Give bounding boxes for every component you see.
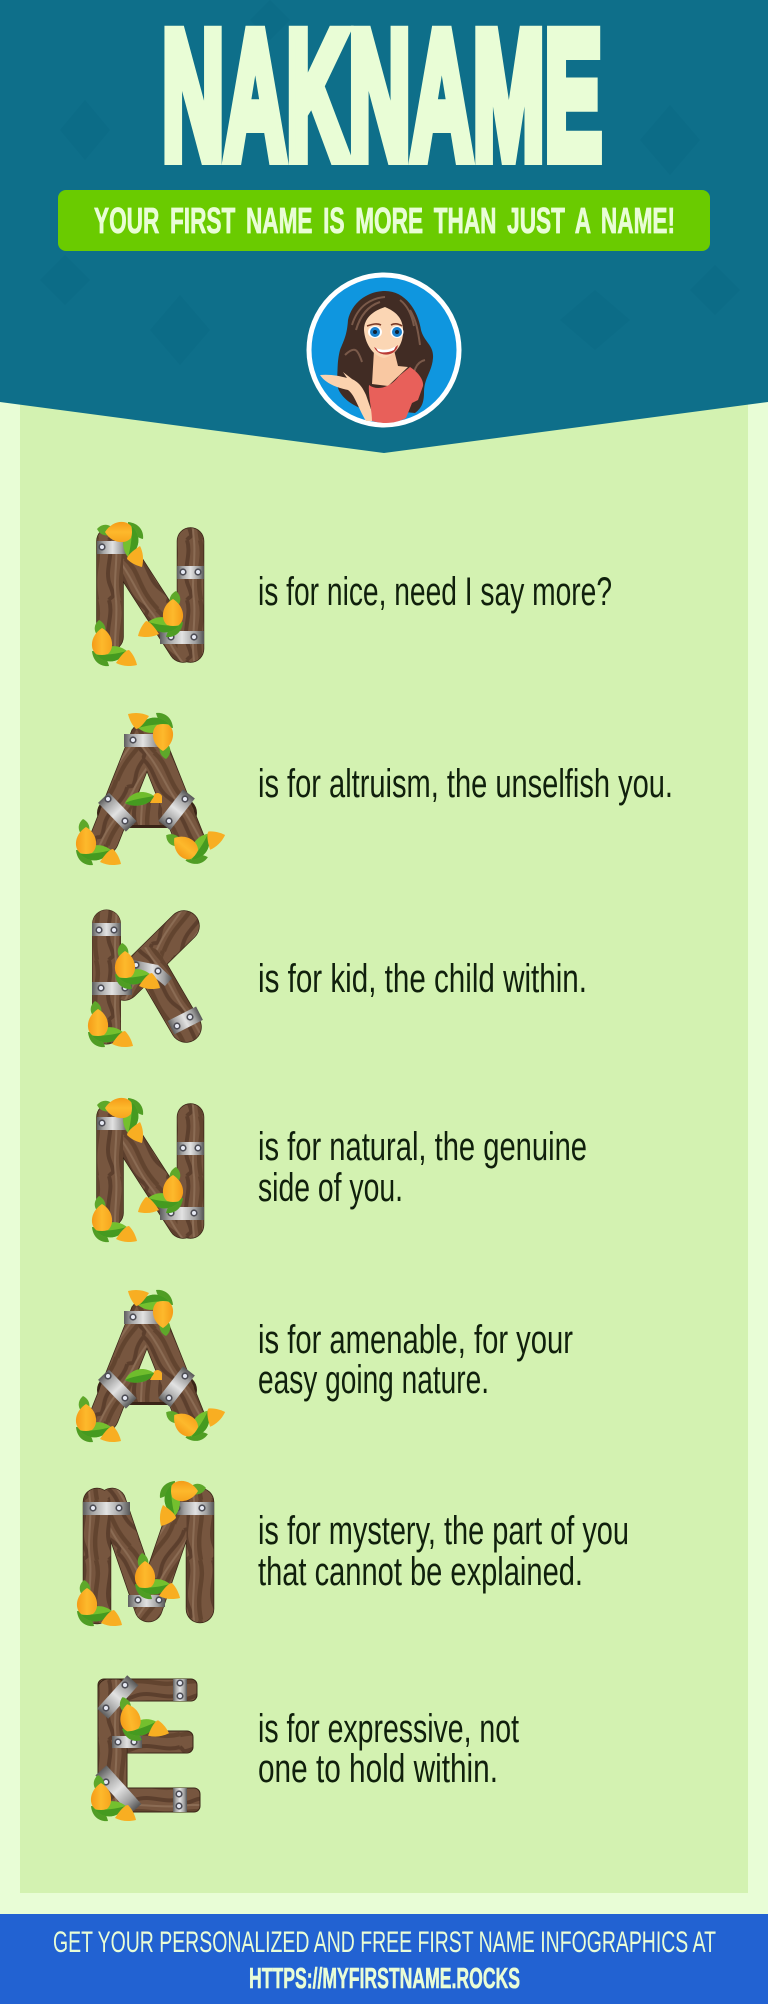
text: E: one to hold within. bbox=[258, 1747, 498, 1791]
text: N: is for nice, need I say more? bbox=[258, 570, 612, 614]
letter A (second) bbox=[76, 1290, 226, 1447]
content panel bbox=[20, 380, 748, 1893]
text: E: is for expressive, not bbox=[258, 1707, 519, 1751]
letter K bbox=[88, 923, 203, 1047]
text: N second: side of you. bbox=[258, 1166, 403, 1210]
letter N bbox=[92, 522, 204, 666]
footer band bbox=[0, 1914, 768, 2004]
text: A second bbox=[258, 1318, 573, 1402]
text: E bbox=[258, 1707, 519, 1791]
text: N second: is for natural, the genuine bbox=[258, 1125, 587, 1169]
letter A bbox=[76, 713, 226, 870]
text: A second: easy going nature. bbox=[258, 1358, 489, 1402]
text: M: that cannot be explained. bbox=[258, 1550, 583, 1594]
subtitle banner bbox=[58, 190, 710, 251]
letter M bbox=[77, 1481, 214, 1626]
text: A second: is for amenable, for your bbox=[258, 1318, 573, 1362]
text: K: is for kid, the child within. bbox=[258, 957, 587, 1001]
text: M bbox=[258, 1509, 629, 1594]
footer band: HTTPS://MYFIRSTNAME.ROCKS bbox=[249, 1963, 520, 1995]
text: M: is for mystery, the part of you bbox=[258, 1509, 629, 1553]
text: N second bbox=[258, 1125, 587, 1210]
letter E bbox=[91, 1675, 200, 1821]
header band with chevron bbox=[0, 0, 768, 453]
letter N (second) bbox=[92, 1098, 204, 1242]
avatar: cartoon woman in circle bbox=[309, 275, 459, 425]
